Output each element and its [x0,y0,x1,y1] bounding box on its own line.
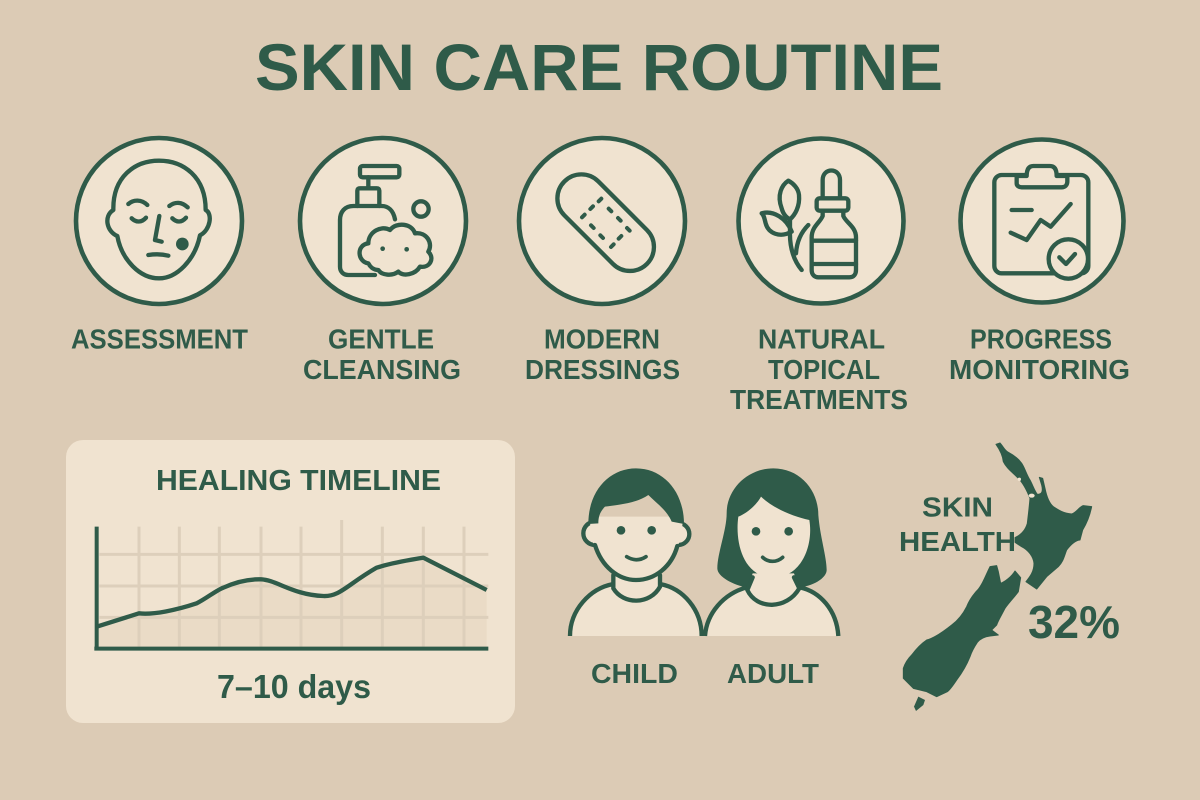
icon: dropper bottle and plant [762,170,856,277]
panel: healing timeline [66,440,515,723]
label: natural topical treatments: NATURAL [758,324,885,354]
icon: bandage [547,164,664,281]
step: assessment [71,138,248,354]
stat: 32%: 32% [1028,596,1120,648]
label: skin health: SKIN [922,492,993,522]
step: progress monitoring [949,140,1130,385]
label: natural topical treatments: TREATMENTS [730,384,908,415]
icon: soap bottle and foam [340,166,431,275]
label: natural topical treatments: TOPICAL [768,354,880,385]
label: modern dressings [525,324,680,385]
map shape [903,443,1092,711]
step: modern dressings [519,138,685,385]
icon: face [107,161,210,278]
people: child and adult [570,468,838,689]
label: modern dressings: DRESSINGS [525,354,680,385]
label: child: CHILD [591,658,678,689]
label: progress monitoring [949,324,1130,385]
child figure [570,468,702,636]
label: progress monitoring: PROGRESS [970,324,1112,354]
label: adult: ADULT [727,658,819,689]
line chart [94,520,488,649]
title: SKIN CARE ROUTINE [255,30,943,104]
icon: clipboard with chart [994,166,1088,279]
label: skin health: HEALTH [899,526,1016,557]
step: gentle cleansing [300,138,466,385]
step: natural topical treatments [730,138,908,415]
label: assessment: ASSESSMENT [71,324,248,354]
map: New Zealand skin health [899,443,1120,711]
heading: healing timeline: HEALING TIMELINE [156,465,441,497]
label: gentle cleansing [303,324,461,385]
label: progress monitoring: MONITORING [949,354,1130,385]
label: modern dressings: MODERN [544,324,660,354]
label: gentle cleansing: GENTLE [328,324,434,354]
adult figure [705,468,838,636]
label: gentle cleansing: CLEANSING [303,354,461,385]
caption: duration: 7–10 days [217,668,371,705]
label: natural topical treatments [730,324,908,415]
label: skin health [899,492,1016,557]
